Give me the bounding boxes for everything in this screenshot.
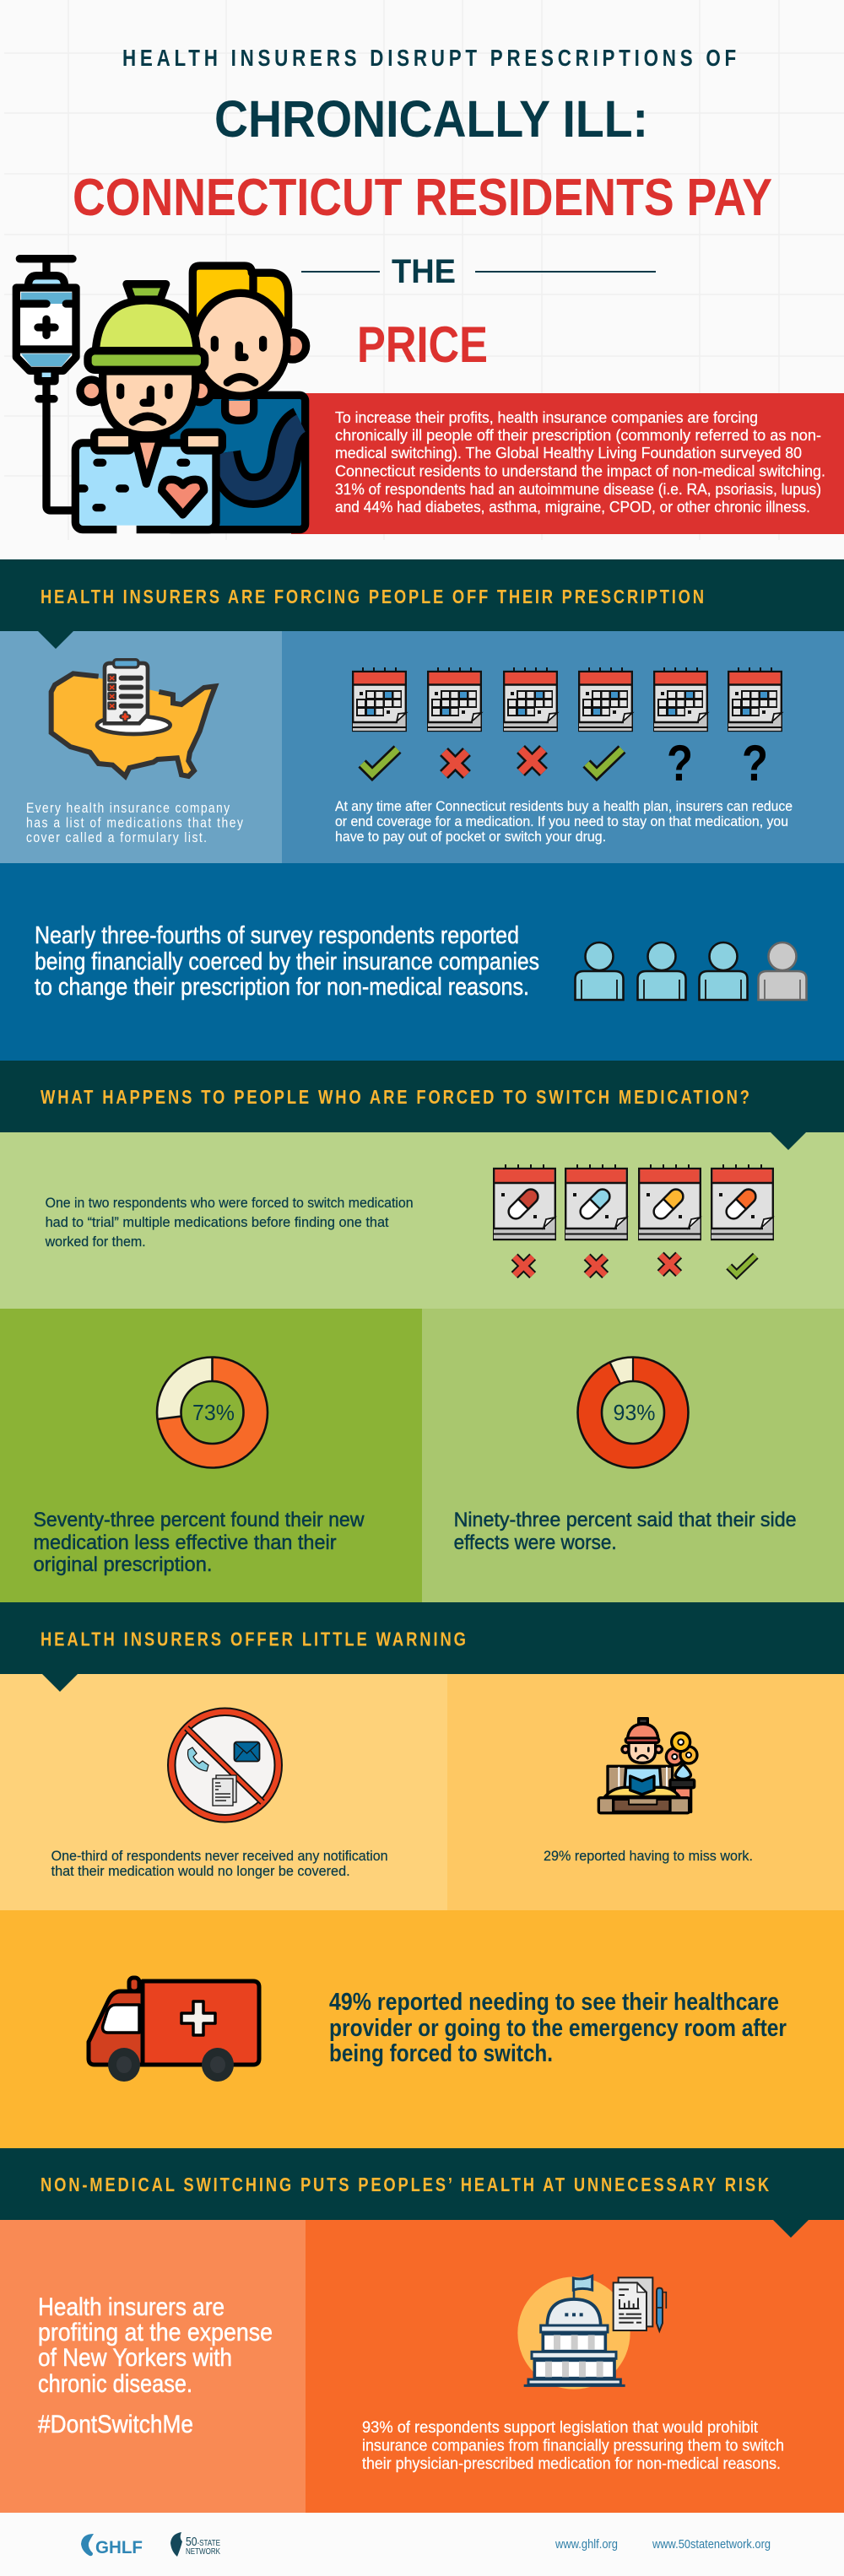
- text: profiting: profiting at the expense: [38, 2319, 273, 2346]
- text: legislation: their physician-prescribed medication for non-medical reasons.: [362, 2455, 781, 2473]
- icon: person in bed reading: [598, 1719, 697, 1813]
- heading: WHAT HAPPENS TO PEOPLE WHO ARE FORCED TO SWITCH MEDICATION?: [41, 1087, 749, 1109]
- text: three-fourths: to change their prescription for non-medical reasons.: [35, 974, 529, 1001]
- text: formulary: Every health insurance company: [26, 801, 230, 816]
- text: profiting: of New Yorkers with: [38, 2344, 232, 2372]
- text: 73 percent: [34, 1509, 365, 1576]
- title line: chronically ill: CHRONICALLY ILL:: [214, 90, 648, 148]
- icon: man behind: [166, 266, 306, 530]
- text: 73 percent: Seventy-three percent found their new: [34, 1509, 365, 1531]
- text: notification: that their medication would no longer be covered.: [51, 1864, 350, 1879]
- logo: GHLF: GHLF: [95, 2538, 143, 2557]
- intro text: [335, 409, 825, 516]
- text: formulary: cover called a formulary list.: [26, 830, 207, 845]
- icon: patient: [75, 284, 222, 530]
- text: coverage: [335, 798, 793, 845]
- text: 93 percent: [454, 1509, 797, 1554]
- icons: check, cross and question marks: ?: [742, 735, 768, 791]
- icon: no phone, mail or letter: [168, 1708, 282, 1823]
- icons: check, cross and question marks: ?: [667, 735, 693, 791]
- text: 73 percent: original prescription.: [34, 1553, 213, 1576]
- intro text: medical switching). The Global Healthy Living Foundation surveyed 80: [335, 445, 802, 462]
- text: emergency room: being forced to switch.: [329, 2040, 553, 2067]
- title: [73, 46, 772, 373]
- text: trial: [45, 1196, 414, 1250]
- icons: three crosses and a check: [515, 1256, 755, 1275]
- panel: profiting: [0, 2220, 306, 2513]
- panel: intro red box: [291, 393, 844, 534]
- triangle: section 3 pointer: [42, 1674, 78, 1692]
- title line: price: PRICE: [357, 316, 488, 373]
- panel: no notification: [0, 1674, 447, 1910]
- icon: patient with carer and IV drip: [16, 259, 306, 530]
- triangle: section 4 pointer: [773, 2220, 809, 2238]
- text: coverage: or end coverage for a medication. If you need to stay on that medication, you: [335, 813, 788, 829]
- section 2 header band: [0, 1061, 844, 1132]
- text: 73 percent: medication less effective than their: [34, 1531, 336, 1554]
- panel: 93 percent: [422, 1309, 844, 1602]
- intro text: and 44% had diabetes, asthma, migraine, CPOD, or other chronic illness.: [335, 499, 810, 516]
- text: profiting: Health insurers are: [38, 2293, 225, 2321]
- icon: capitol and documents: [517, 2276, 666, 2390]
- text: profiting: [38, 2293, 273, 2438]
- chart: donut 93%: 93%: [613, 1400, 655, 1425]
- title line: kicker: HEALTH INSURERS DISRUPT PRESCRIPTIONS OF: [122, 46, 736, 72]
- intro text: Connecticut residents to understand the impact of non-medical switching.: [335, 462, 825, 479]
- text: missed work: 29% reported having to miss work.: [544, 1849, 753, 1864]
- icon: pill calendars: [494, 1164, 773, 1239]
- section 1 header band: [0, 559, 844, 631]
- text: formulary: has a list of medications that they: [26, 815, 243, 831]
- hashtag: #DontSwitchMe: [38, 2411, 193, 2438]
- intro text: To increase their profits, health insurance companies are forcing: [335, 409, 758, 426]
- text: emergency room: 49% reported needing to see their healthcare: [329, 1989, 779, 2016]
- panel: legislation support: [306, 2220, 844, 2513]
- text: three-fourths: Nearly three-fourths of survey respondents reported: [35, 922, 519, 949]
- chart: donut 73%: [157, 1357, 268, 1468]
- text: formulary: [26, 801, 243, 845]
- icons: check, cross and question marks: [362, 735, 768, 791]
- intro text: 31% of respondents had an autoimmune disease (i.e. RA, psoriasis, lupus): [335, 481, 821, 498]
- footer: [0, 2513, 844, 2576]
- icon: calendars: [353, 667, 782, 731]
- text: legislation: [362, 2419, 784, 2473]
- text: trial: One in two respondents who were forced to switch medication: [46, 1196, 414, 1211]
- panel: emergency room: [0, 1910, 844, 2148]
- heading: NON-MEDICAL SWITCHING PUTS PEOPLES’ HEALTH AT UNNECESSARY RISK: [41, 2174, 769, 2196]
- icon: four people, three highlighted: [576, 942, 807, 1000]
- intro text: chronically ill people off their prescription (commonly referred to as non-: [335, 427, 821, 444]
- text: legislation: insurance companies from financially pressuring them to switch: [362, 2437, 784, 2455]
- panel: formulary list: [0, 631, 282, 863]
- link: 50statenetwork: www.50statenetwork.org: [652, 2537, 771, 2552]
- text: coverage: have to pay out of pocket or switch your drug.: [335, 829, 606, 845]
- icon: IV drip: [16, 259, 76, 510]
- link: ghlf: www.ghlf.org: [555, 2537, 618, 2552]
- text: trial: had to “trial” multiple medications before finding one that: [46, 1215, 389, 1230]
- icon: ambulance: [89, 1978, 259, 2082]
- logo: GHLF: [81, 2534, 143, 2557]
- title line: the: THE: [392, 253, 456, 290]
- text: notification: One-third of respondents never received any notification: [51, 1849, 388, 1864]
- heading: HEALTH INSURERS OFFER LITTLE WARNING: [41, 1629, 466, 1650]
- triangle: section 1 pointer: [38, 631, 73, 649]
- section 3 header band: [0, 1602, 844, 1674]
- heading: HEALTH INSURERS ARE FORCING PEOPLE OFF THEIR PRESCRIPTION: [41, 586, 704, 608]
- panel: 73 percent: [0, 1309, 422, 1602]
- triangle: section 2 pointer: [771, 1132, 806, 1150]
- logo: 50-State Network: [170, 2532, 220, 2557]
- text: three-fourths: [35, 922, 539, 1001]
- text: notification: [51, 1849, 388, 1879]
- logo: 50-State Network: 50-STATE: [186, 2535, 220, 2549]
- panel: coverage calendars: [282, 631, 844, 863]
- text: 93 percent: effects were worse.: [454, 1531, 617, 1554]
- text: profiting: chronic disease.: [38, 2370, 192, 2398]
- section 4 header band: [0, 2148, 844, 2220]
- text: coverage: At any time after Connecticut residents buy a health plan, insurers can reduce: [335, 798, 793, 814]
- text: three-fourths: being financially coerced by their insurance companies: [35, 948, 539, 975]
- icon: USA map with formulary clipboard: [51, 660, 215, 776]
- panel: three-fourths coerced: [0, 863, 844, 1061]
- chart: donut 93%: [577, 1357, 689, 1468]
- panel: trial medications: [0, 1132, 844, 1309]
- chart: donut 73%: 73%: [192, 1400, 235, 1425]
- text: emergency room: [329, 1989, 787, 2067]
- panel: missed work: [447, 1674, 844, 1910]
- logo: 50-State Network: NETWORK: [186, 2547, 220, 2557]
- text: legislation: 93% of respondents support legislation that would prohibit: [362, 2419, 759, 2437]
- text: trial: worked for them.: [45, 1234, 146, 1250]
- text: 93 percent: Ninety-three percent said that their side: [454, 1509, 797, 1531]
